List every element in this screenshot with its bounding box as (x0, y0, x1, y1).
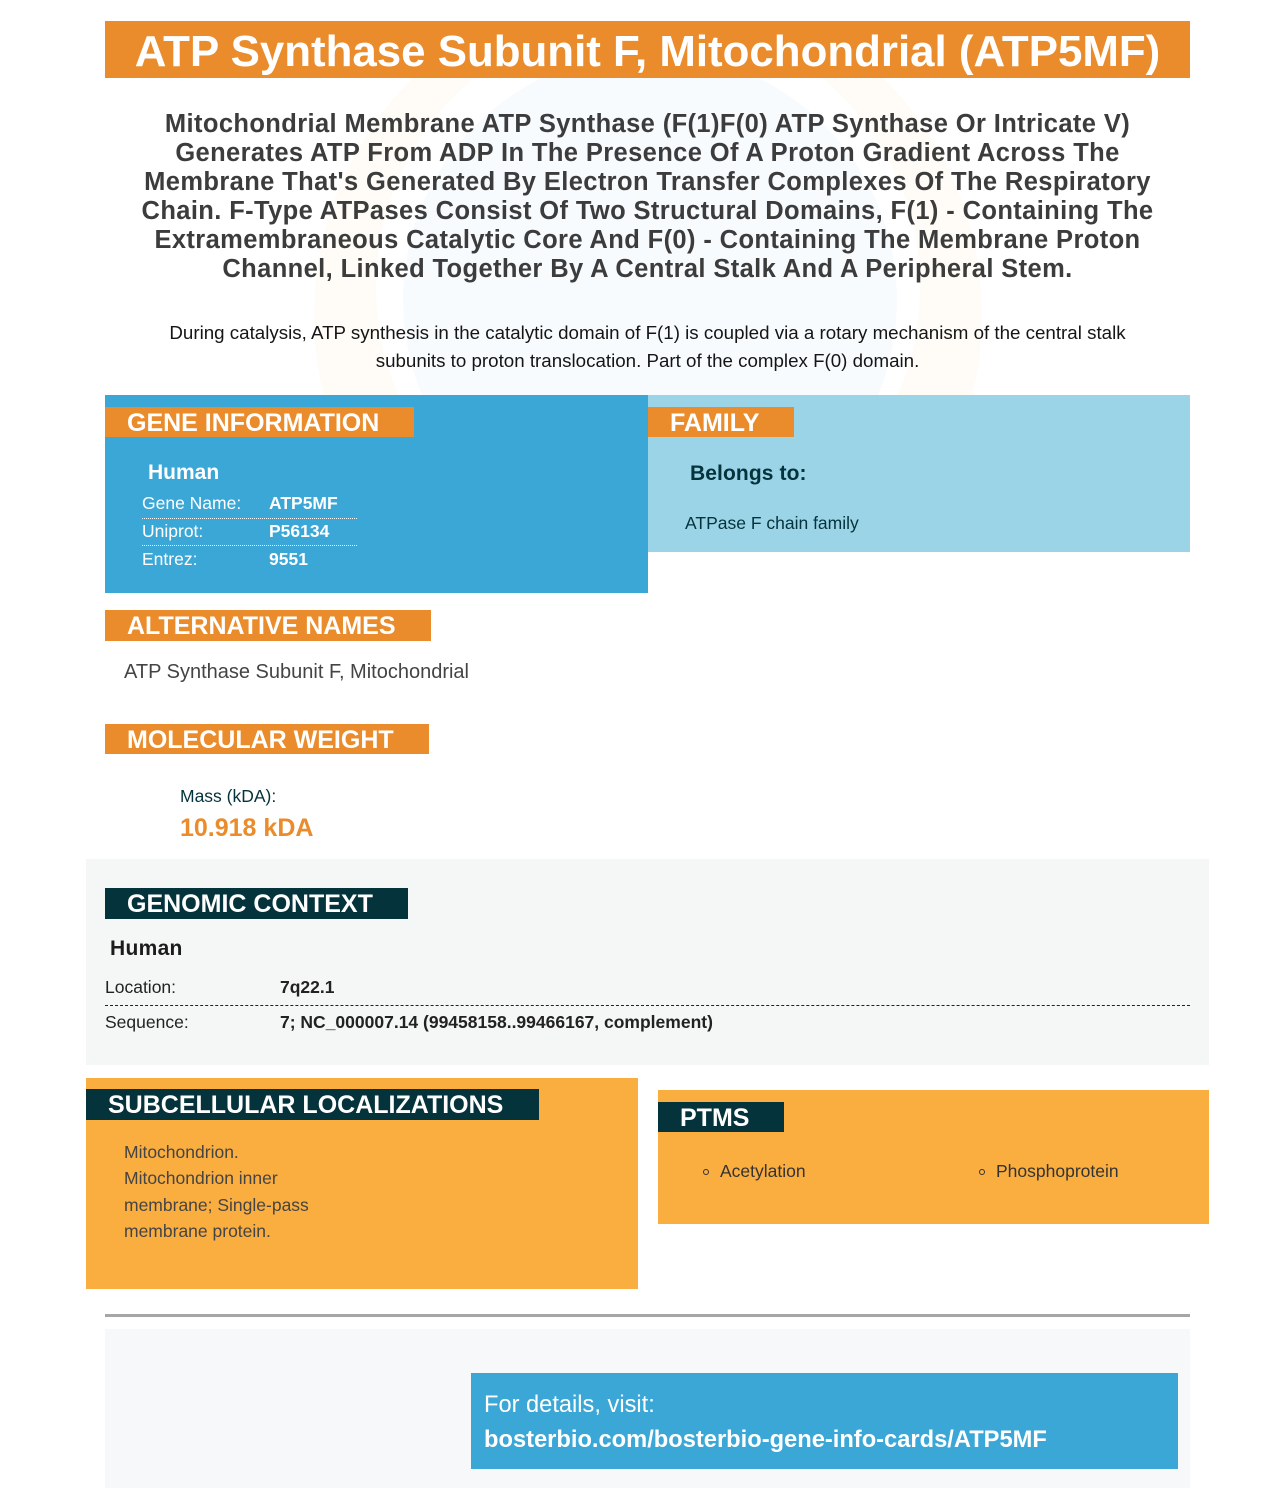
heading: family: FAMILY (670, 409, 759, 437)
gene name row: Gene Name: (142, 493, 241, 513)
localization text: membrane protein. (124, 1221, 271, 1241)
summary heading: Chain. F-Type ATPases Consist Of Two Structural Domains, F(1) - Containing The (142, 197, 1153, 225)
location row (105, 975, 1190, 1006)
callout url: bosterbio.com/bosterbio-gene-info-cards/ATP5MF (484, 1427, 1047, 1453)
panel: family (648, 395, 1190, 552)
mass value: 10.918 kDA (180, 814, 313, 842)
summary heading: Generates ATP From ADP In The Presence Of A Proton Gradient Across The (175, 139, 1120, 167)
callout label: For details, visit: (484, 1392, 655, 1418)
uniprot row (142, 520, 357, 546)
ptm: acetylation: Acetylation (720, 1161, 806, 1181)
mass label: Mass (kDA): (180, 786, 276, 806)
heading: alternative names: ALTERNATIVE NAMES (127, 612, 396, 640)
callout: details link (471, 1373, 1178, 1469)
entrez row (142, 549, 308, 569)
summary heading: Membrane That's Generated By Electron Transfer Complexes Of The Respiratory (144, 168, 1151, 196)
sequence row: Sequence: (105, 1012, 189, 1032)
entrez row: Entrez: (142, 549, 197, 569)
heading: family (648, 407, 794, 437)
gene name row: ATP5MF (269, 493, 338, 513)
footer rule (105, 1314, 1190, 1317)
panel: subcellular localizations (86, 1078, 638, 1289)
summary heading: Mitochondrial Membrane ATP Synthase (F(1)F(0) ATP Synthase Or Intricate V) (165, 110, 1130, 138)
ptm: phosphoprotein: Phosphoprotein (996, 1161, 1119, 1181)
gene name row (142, 492, 357, 519)
uniprot row: P56134 (269, 521, 329, 541)
summary heading (142, 110, 1153, 283)
localization text: membrane; Single-pass (124, 1195, 309, 1215)
panel: ptms (658, 1090, 1209, 1224)
sequence row: 7; NC_000007.14 (99458158..99466167, complement) (280, 1012, 713, 1032)
species label: Human (110, 937, 183, 960)
panel: gene information (105, 395, 648, 593)
heading: gene information: GENE INFORMATION (127, 409, 379, 437)
localization text (124, 1142, 309, 1241)
description text: During catalysis, ATP synthesis in the catalytic domain of F(1) is coupled via a rotary mechanism of the central stalk (169, 322, 1126, 343)
panel: footer (105, 1329, 1190, 1488)
localization text: Mitochondrion inner (124, 1168, 278, 1188)
species label: Human (148, 461, 219, 484)
heading: subcellular localizations: SUBCELLULAR LOCALIZATIONS (108, 1091, 503, 1119)
localization text: Mitochondrion. (124, 1142, 239, 1162)
heading: molecular weight: MOLECULAR WEIGHT (127, 726, 394, 754)
background watermark rings (0, 78, 1288, 398)
description text: subunits to proton translocation. Part of the complex F(0) domain. (376, 350, 919, 371)
panel: genomic context (86, 859, 1209, 1065)
summary heading: Channel, Linked Together By A Central Stalk And A Peripheral Stem. (222, 255, 1073, 283)
location row: 7q22.1 (280, 977, 334, 997)
alternative names text: ATP Synthase Subunit F, Mitochondrial (124, 661, 469, 683)
description text (169, 322, 1126, 371)
heading: genomic context: GENOMIC CONTEXT (127, 890, 373, 918)
belongs to label: Belongs to: (690, 462, 807, 485)
family value: ATPase F chain family (685, 513, 859, 533)
location row: Location: (105, 977, 176, 997)
title: ATP Synthase Subunit F, Mitochondrial (ATP5MF) (135, 27, 1160, 76)
uniprot row: Uniprot: (142, 521, 203, 541)
summary heading: Extramembraneous Catalytic Core And F(0) - Containing The Membrane Proton (154, 226, 1140, 254)
entrez row: 9551 (269, 549, 308, 569)
heading: ptms (658, 1102, 784, 1132)
heading: ptms: PTMS (680, 1104, 749, 1132)
